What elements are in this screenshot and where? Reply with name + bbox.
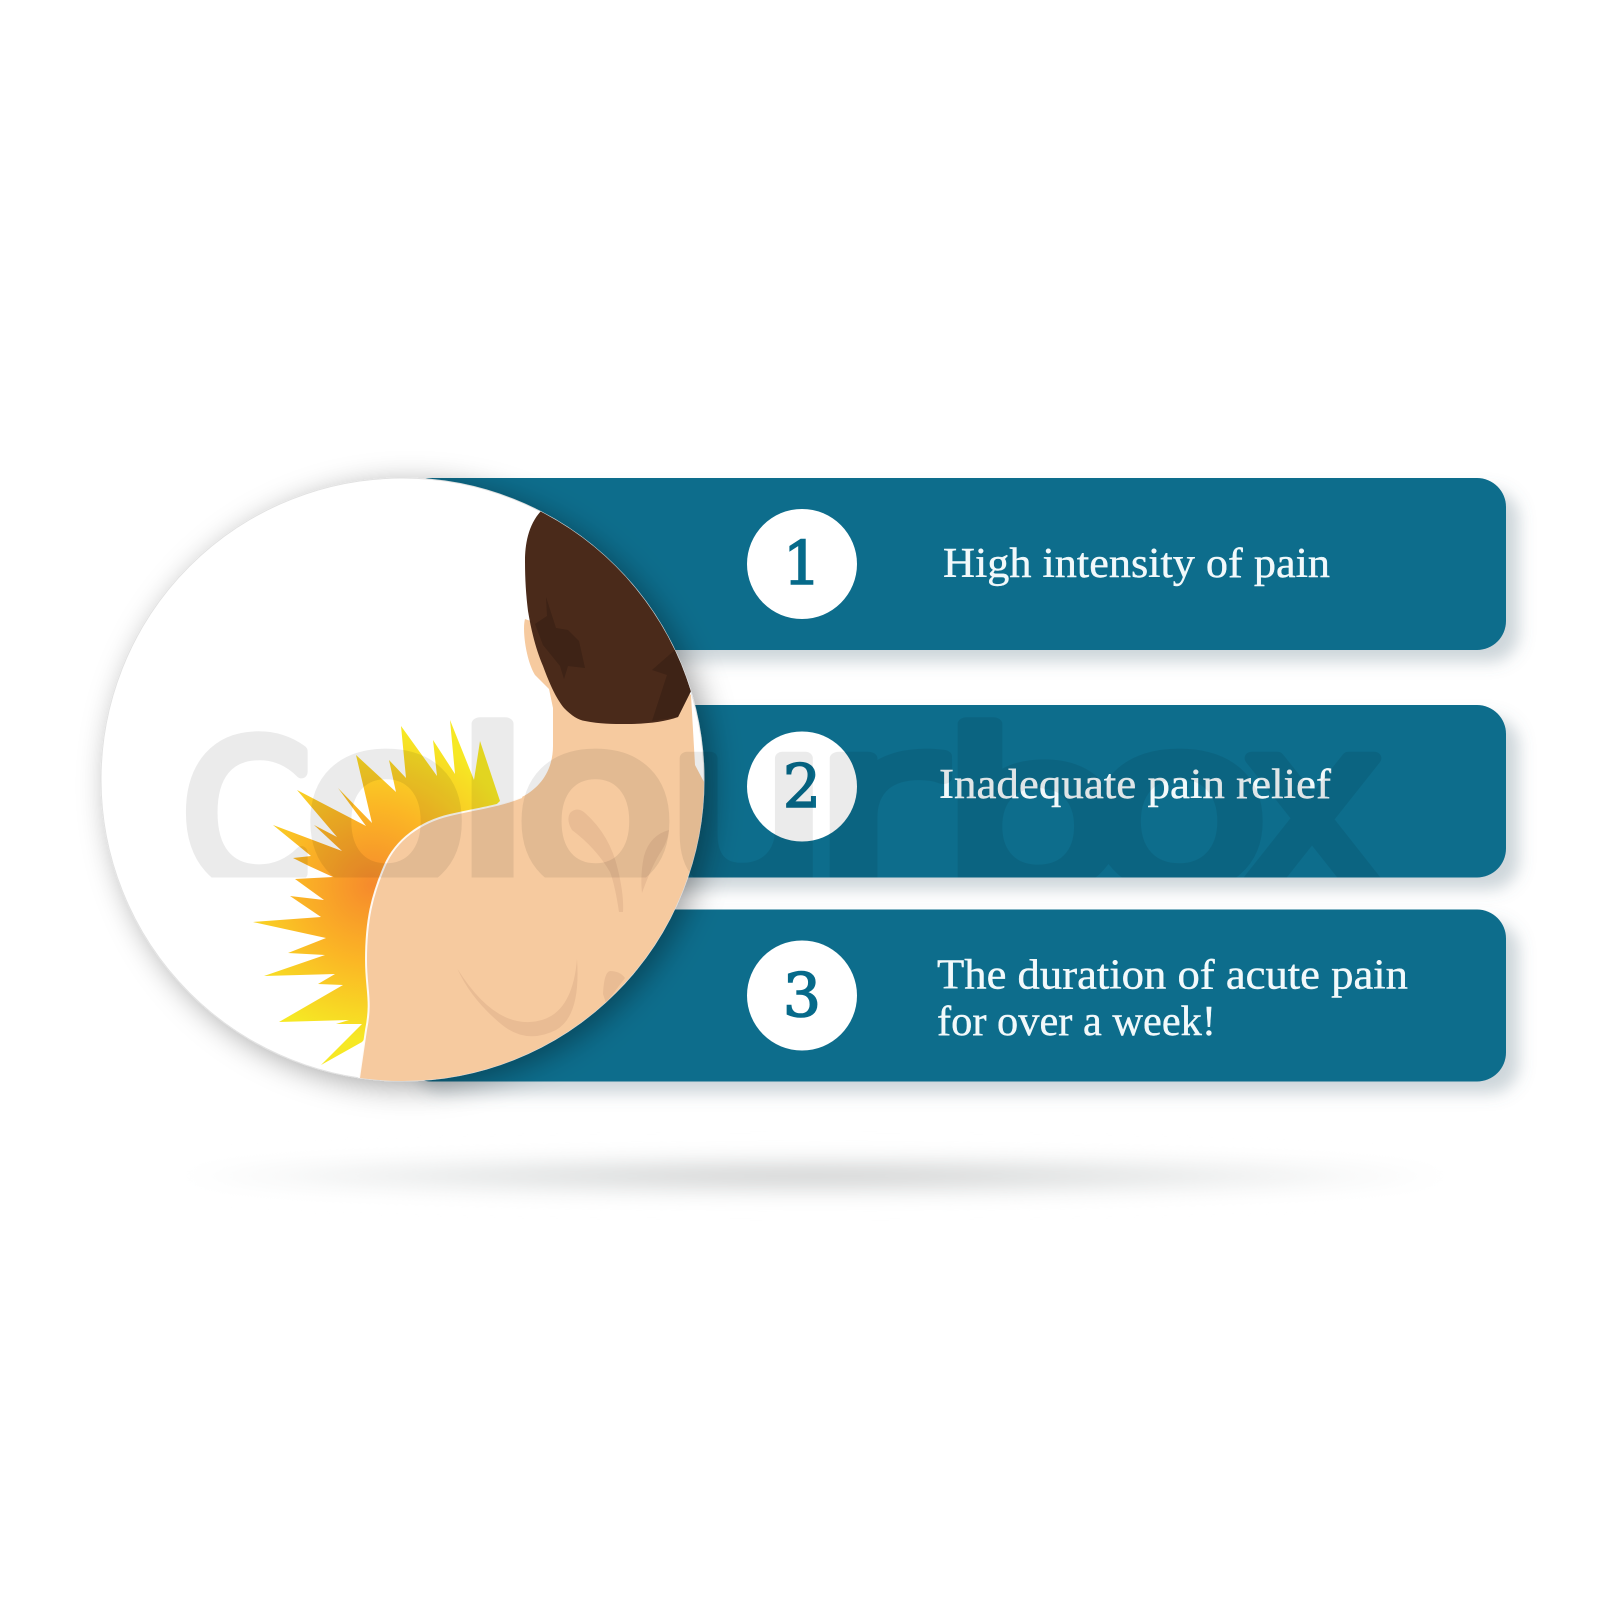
figure: neck crease: [641, 830, 669, 893]
watermark: Colourbox: x: [1240, 672, 1385, 939]
watermark: Colourbox: o: [303, 672, 469, 939]
watermark: Colourbox: u: [665, 672, 829, 939]
icon: number 1 badge: [747, 509, 857, 619]
text: duration of acute pain: The duration of acute pain: [937, 952, 1408, 998]
figure: shoulder outline: [358, 797, 522, 1085]
watermark: Colourbox: [186, 717, 1381, 878]
watermark: Colourbox: l: [454, 688, 531, 934]
icon: number 2 badge: 2: [783, 752, 821, 822]
figure: hair shadow right: [652, 649, 691, 721]
text: duration of acute pain: for over a week!: [937, 999, 1216, 1045]
figure: shoulder crease: [603, 971, 625, 1003]
watermark: Colourbox: o: [1088, 672, 1271, 939]
icon: number 3 badge: 3: [783, 961, 821, 1031]
panel: bar 3 duration: [402, 910, 1506, 1082]
figure: chest crease: [458, 959, 578, 1036]
watermark: Colourbox: r: [809, 672, 944, 939]
icon: number 3 badge: [747, 940, 857, 1050]
panel: bar 1 high intensity: [402, 478, 1506, 650]
figure: hair shadow left: [535, 597, 585, 679]
text: inadequate pain relief: Inadequate pain relief: [939, 762, 1331, 808]
figure: collar bone crease: [568, 810, 623, 912]
panel: bar 2 inadequate relief: [402, 705, 1506, 878]
figure: hair: [525, 511, 691, 724]
icon: pain burst: [253, 720, 500, 1065]
illustration: circle with neck pain figure: [101, 478, 720, 1085]
text: duration of acute pain: [937, 952, 1408, 1045]
watermark: Colourbox: o: [514, 672, 676, 939]
watermark: Colourbox: b: [940, 688, 1127, 934]
text: high intensity of pain: High intensity of pain: [943, 541, 1330, 587]
icon: number 1 badge: 1: [783, 529, 821, 599]
watermark: Colourbox: C: [182, 702, 312, 931]
figure: skin body and neck: [358, 619, 720, 1085]
icon: number 2 badge: [747, 732, 857, 842]
ground shadow: [165, 1156, 1465, 1196]
